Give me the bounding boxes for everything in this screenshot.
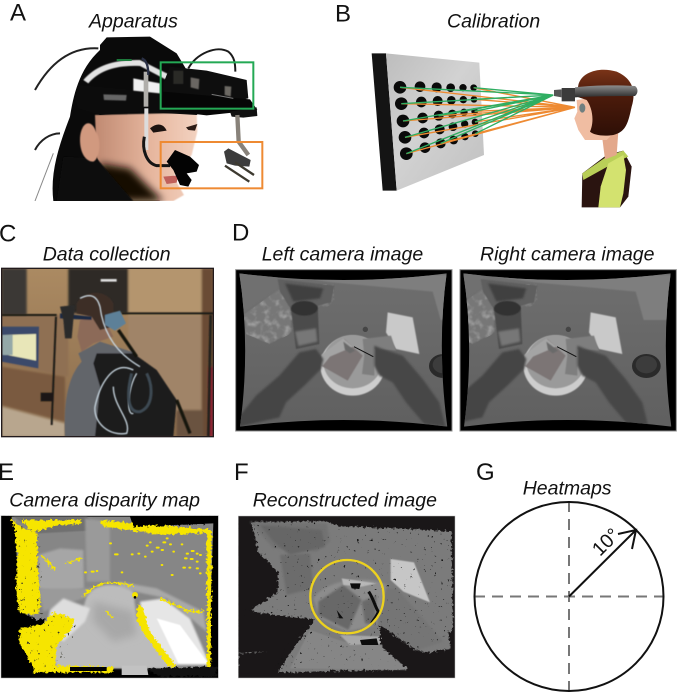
panel E: disparity map [1,516,218,678]
orange sight lines [400,87,575,154]
title: Left camera image: Left camera image [262,244,423,266]
title: Calibration: Calibration [447,11,540,33]
panel D: left camera image [235,269,452,432]
panel D: right camera image [460,269,677,432]
title: Reconstructed image: Reconstructed image [253,490,437,512]
background windows [2,268,213,437]
calibration board [372,53,484,191]
title: Data collection: Data collection [43,244,171,266]
green box [161,62,253,109]
panel G: heatmap diagram [474,501,664,692]
green sight lines [400,87,553,154]
label B: B [335,0,351,28]
panel C: data collection photo [2,268,213,437]
outer circle [474,502,664,691]
title: Camera disparity map: Camera disparity map [9,490,200,512]
yellow speckle clusters [85,538,201,575]
wires [80,296,140,434]
panel F: reconstructed image [238,516,455,678]
panel B: calibration illustration [372,53,637,207]
title: Heatmaps: Heatmaps [523,477,612,499]
fence [2,313,213,437]
radius arrow [569,530,636,596]
dashed axes [474,501,664,692]
label F: F [234,459,249,486]
man [60,293,190,437]
sign [2,327,39,368]
yellow noise bands [10,518,212,672]
label A: A [10,0,26,26]
orange box [161,142,262,188]
cartoon person [554,70,637,207]
yellow circle [310,560,384,633]
label D: D [232,220,249,247]
panel A: apparatus photo [35,37,262,201]
title: Right camera image: Right camera image [480,244,655,266]
label G: G [476,459,495,486]
angle label: 10° [588,524,624,561]
title: Apparatus: Apparatus [88,11,178,33]
